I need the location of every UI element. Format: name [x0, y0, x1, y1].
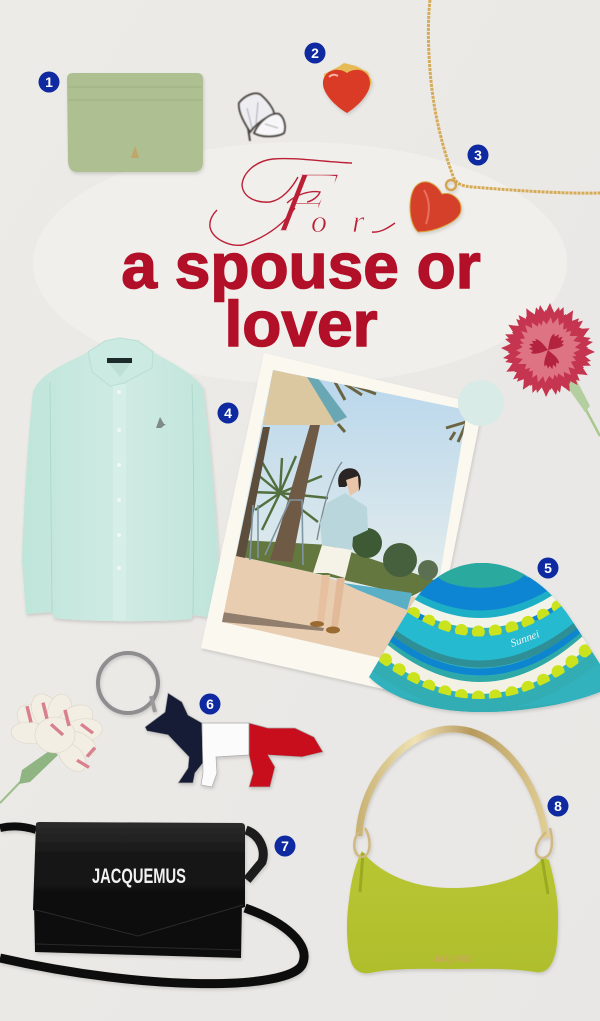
bucket hat — [369, 563, 600, 715]
badge 6 — [200, 694, 220, 714]
badge 8 — [548, 796, 568, 816]
number badges — [38, 42, 568, 856]
script word — [210, 152, 395, 252]
badge 5: 5 — [544, 560, 552, 576]
ground — [222, 556, 416, 658]
decorative circle — [458, 380, 504, 426]
ring with red heart — [323, 63, 372, 113]
fox keychain — [98, 653, 323, 787]
badge 3: 3 — [474, 147, 482, 163]
shirt — [22, 338, 221, 621]
bag logo: JACQUEMUS — [92, 865, 186, 888]
butterfly — [239, 93, 285, 141]
carnation red — [498, 300, 600, 436]
lime handbag — [347, 729, 558, 973]
badge 6: 6 — [206, 696, 214, 712]
badge 7 — [274, 836, 296, 856]
bucket hat: Sunnei — [509, 628, 541, 650]
badge 4: 4 — [224, 405, 232, 421]
badge 2: 2 — [311, 45, 319, 61]
main heading: lover — [225, 288, 377, 360]
badge 8: 8 — [554, 798, 562, 814]
handbag logo: JACQUEMUS — [434, 954, 472, 964]
photo polaroid — [201, 353, 504, 698]
person — [222, 468, 368, 634]
black crossbody bag — [0, 822, 304, 984]
title — [121, 152, 481, 360]
badge 5 — [538, 558, 558, 578]
badge 2 — [304, 42, 326, 64]
palm fronds — [250, 456, 328, 530]
main heading: a spouse or — [121, 230, 481, 302]
script word: or — [311, 203, 365, 239]
card wallet — [67, 73, 203, 172]
pendant heart — [410, 180, 461, 232]
beach photo — [222, 370, 466, 658]
badge 3 — [468, 144, 488, 166]
necklace chain — [428, 0, 600, 193]
badge 7: 7 — [281, 838, 289, 854]
photo frame — [201, 353, 483, 698]
background ellipse — [33, 142, 567, 384]
badge 1: 1 — [45, 74, 53, 90]
carnation white — [0, 690, 105, 803]
upper fronds — [335, 382, 466, 442]
badge 1 — [38, 72, 60, 92]
hedge and trees — [238, 540, 440, 596]
badge 4 — [218, 402, 238, 424]
script word: F — [267, 152, 345, 252]
main heading — [121, 230, 481, 360]
